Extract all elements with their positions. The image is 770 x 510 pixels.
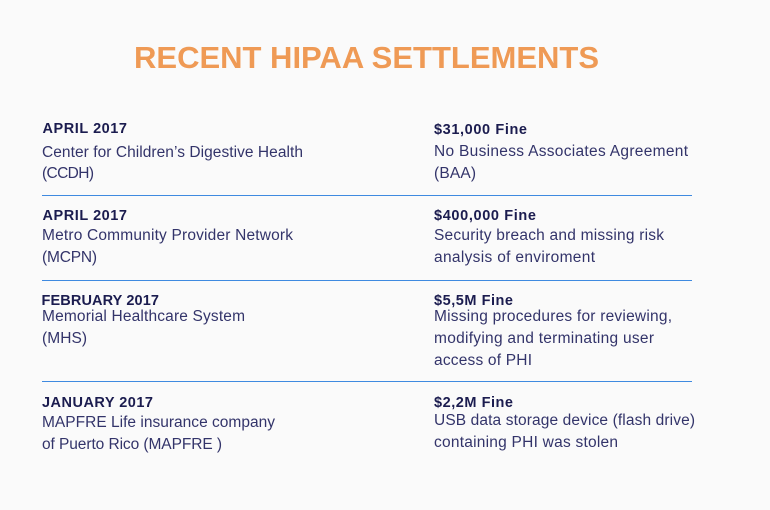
organization [42,308,245,347]
organization: Memorial Healthcare System [42,308,245,325]
fine amount: $400,000 Fine [434,208,536,224]
organization: (MCPN) [42,249,97,266]
organization [42,414,275,453]
reason: (BAA) [434,165,476,182]
fine amount: $2,2M Fine [434,395,513,411]
row 3: MHS settlement [42,293,672,369]
organization: (CCDH) [42,165,94,182]
organization: of Puerto Rico (MAPFRE ) [42,436,222,453]
date: JANUARY 2017 [42,395,153,411]
organization: MAPFRE Life insurance company [42,414,275,431]
reason: Missing procedures for reviewing, [434,308,672,325]
date: APRIL 2017 [42,208,127,224]
reason [434,143,689,182]
reason [434,227,664,266]
fine amount: $31,000 Fine [434,122,527,138]
fine amount: $5,5M Fine [434,293,513,309]
row 1: CCDH settlement [42,121,689,182]
organization [42,144,303,182]
reason: No Business Associates Agreement [434,143,689,160]
reason: analysis of enviroment [434,249,596,266]
reason: containing PHI was stolen [434,434,618,451]
title: RECENT HIPAA SETTLEMENTS [134,40,599,75]
reason: access of PHI [434,352,532,369]
date: FEBRUARY 2017 [42,293,159,309]
reason [434,412,695,451]
organization [42,227,293,266]
organization: Metro Community Provider Network [42,227,293,244]
row 2: MCPN settlement [42,208,664,266]
reason: USB data storage device (flash drive) [434,412,695,429]
reason: modifying and terminating user [434,330,654,347]
reason: Security breach and missing risk [434,227,664,244]
organization: (MHS) [42,330,87,347]
date: APRIL 2017 [42,121,127,137]
row 4: MAPFRE settlement [42,395,695,453]
reason [434,308,672,369]
organization: Center for Children’s Digestive Health [42,144,303,161]
